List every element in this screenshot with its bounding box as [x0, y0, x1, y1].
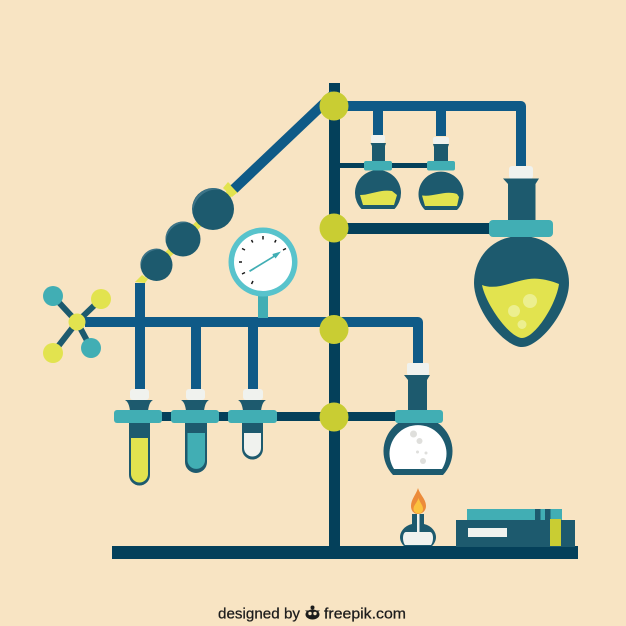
- small flask 1: [355, 135, 401, 209]
- test tube white: [228, 389, 277, 460]
- support rods: [150, 163, 490, 421]
- test tube teal: [171, 389, 219, 473]
- burner: [400, 488, 436, 546]
- stand: main vertical rod and base: [112, 83, 578, 559]
- bead chain: [135, 182, 238, 283]
- credit line: designed by: [218, 606, 301, 622]
- junction nodes: [320, 92, 348, 432]
- books: [456, 509, 575, 547]
- middle pipes: [85, 283, 418, 390]
- small flask 2: [418, 137, 464, 210]
- test tube yellow: [114, 389, 162, 486]
- gauge: [228, 228, 298, 318]
- large flask: [474, 166, 569, 347]
- credit line: freepik.com: [324, 606, 406, 622]
- round flask: [384, 363, 452, 475]
- upper pipes: [340, 106, 521, 166]
- diagonal pipe: [234, 94, 334, 189]
- credit line: [218, 606, 406, 622]
- molecule: [43, 286, 111, 363]
